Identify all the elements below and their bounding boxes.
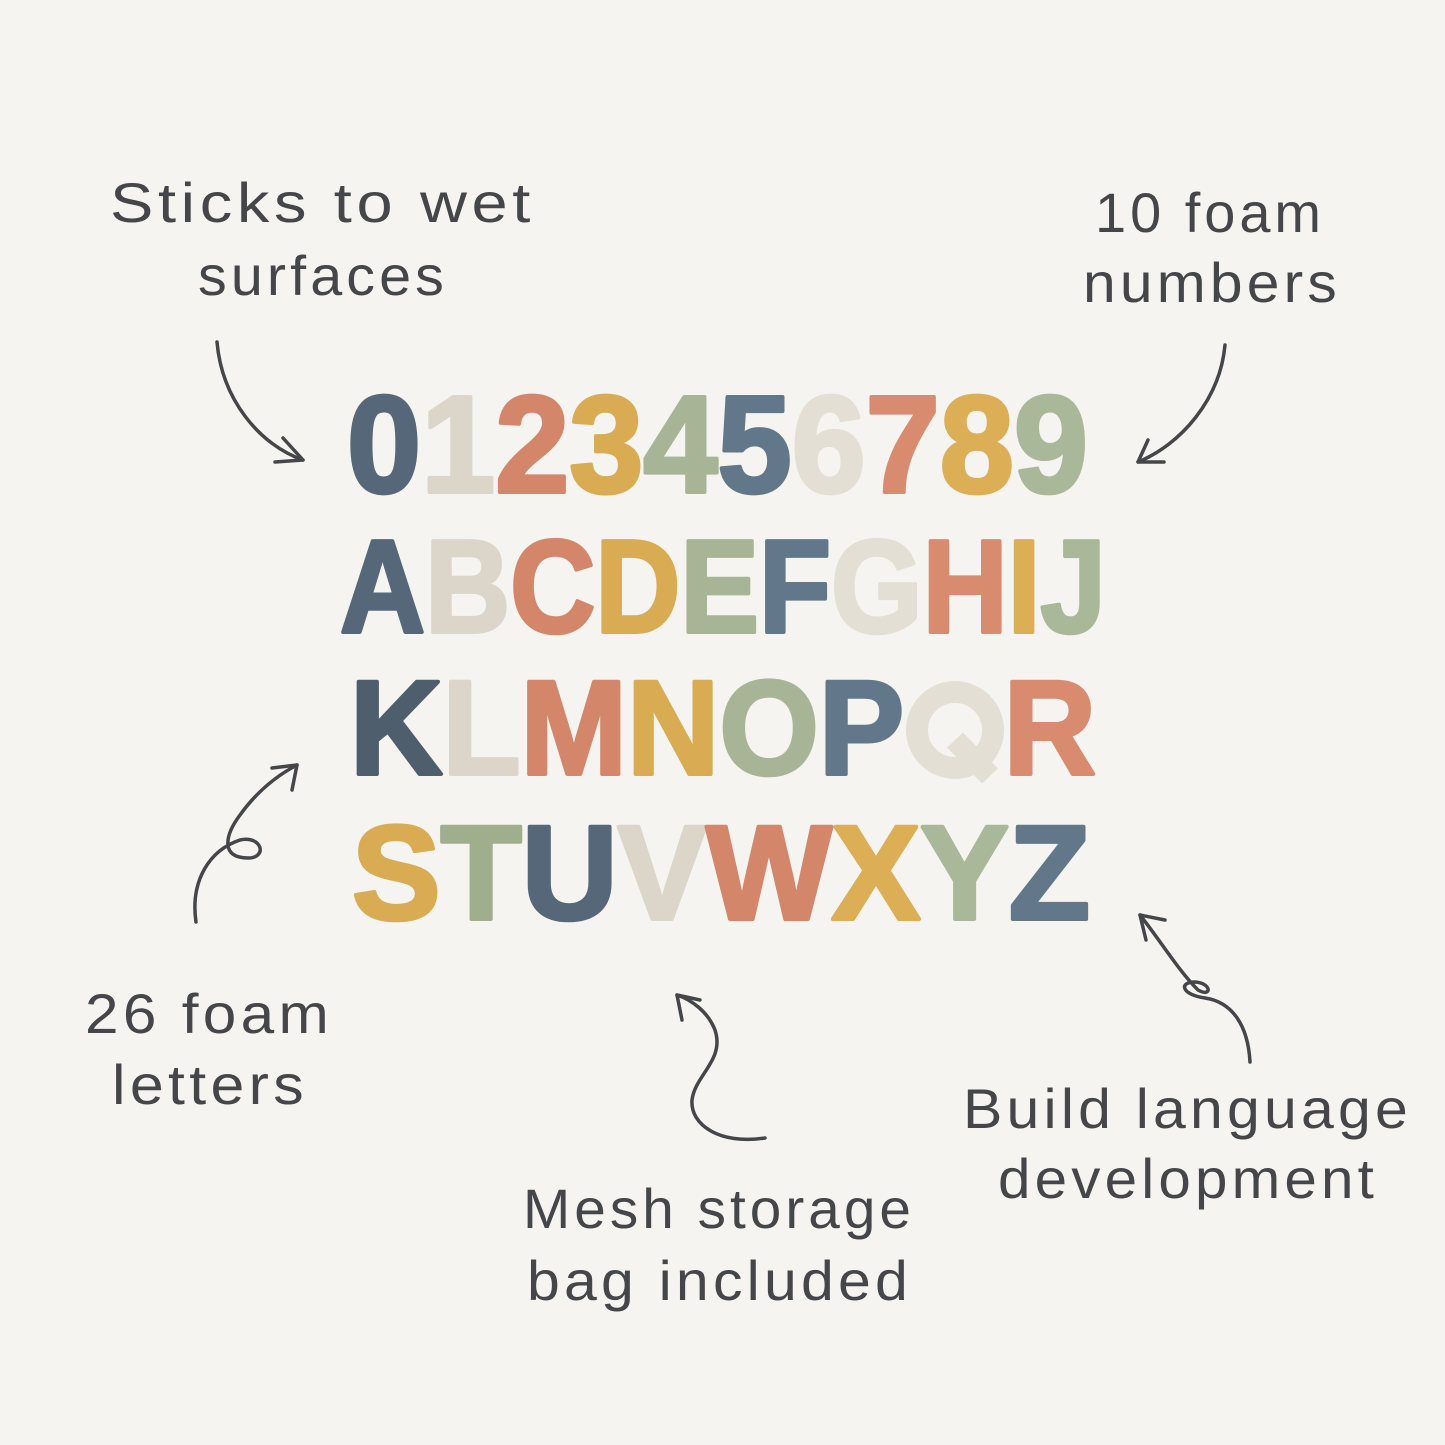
row: letters K-R: KLMNOPQR [350, 654, 1096, 803]
label: mesh storage bag included [523, 1177, 915, 1312]
label: 10 foam numbers: numbers [1083, 251, 1341, 314]
label: sticks to wet surfaces: surfaces [198, 244, 448, 307]
label: sticks to wet surfaces: Sticks to wet [110, 171, 535, 234]
label: mesh storage bag included: bag included [527, 1249, 912, 1312]
label: 26 foam letters: 26 foam [85, 982, 333, 1045]
label: mesh storage bag included: Mesh storage [523, 1177, 915, 1240]
label: sticks to wet surfaces [110, 171, 535, 307]
row: letters S-Z: STUVWXYZ [352, 799, 1090, 948]
label: 10 foam numbers [1083, 181, 1341, 314]
arrow: build language [1140, 915, 1250, 1062]
row: letters A-J: ABCDEFGHIJ [340, 513, 1106, 660]
arrow: 26 foam letters [195, 765, 297, 922]
arrow: mesh storage bag [677, 995, 765, 1139]
label: 10 foam numbers: 10 foam [1095, 181, 1325, 244]
label: build language development: development [998, 1147, 1378, 1210]
label: 26 foam letters [85, 982, 333, 1116]
arrow: 10 foam numbers [1138, 345, 1225, 462]
label: 26 foam letters: letters [112, 1053, 308, 1116]
label: build language development [963, 1077, 1412, 1210]
label: build language development: Build language [963, 1077, 1412, 1140]
row: numbers 0-9: 0123456789 [347, 368, 1088, 522]
arrow: sticks to numbers [217, 342, 303, 462]
letter Q [917, 692, 993, 776]
